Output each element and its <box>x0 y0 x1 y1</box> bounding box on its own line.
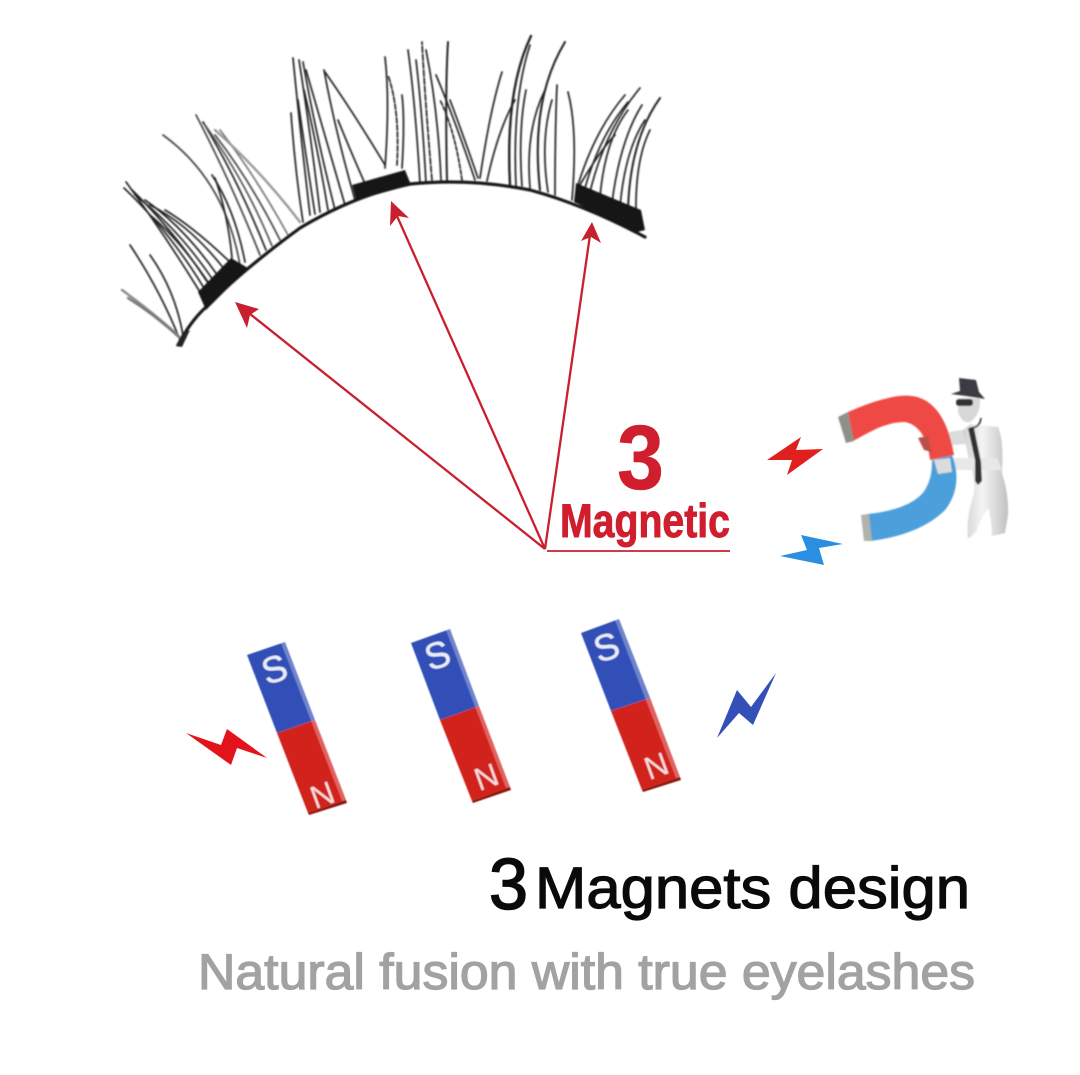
words: Magnets design <box>535 856 970 921</box>
icon: horseshoe magnet with man <box>838 378 1008 541</box>
magnet end: red <box>838 412 854 443</box>
bar magnet 3: S <box>588 624 625 671</box>
heading: 3Magnets design <box>489 845 970 925</box>
bar magnet 1: S <box>256 646 293 693</box>
icon: blue lightning <box>717 673 776 738</box>
arrow to right magnet <box>545 222 601 549</box>
magnet: red pole <box>848 396 954 460</box>
word Magnetic: Magnetic <box>560 494 730 547</box>
man legs and torso <box>956 424 1008 539</box>
underline <box>547 550 730 552</box>
lash band <box>178 182 645 345</box>
magnet strip: left <box>198 258 248 310</box>
bar magnet 1: N <box>305 774 339 816</box>
tie <box>968 428 982 485</box>
magnet strip: middle <box>352 170 411 200</box>
collar <box>970 418 981 428</box>
hat <box>951 378 985 399</box>
bar magnet 2: N <box>469 756 503 798</box>
arrow to left magnet <box>235 302 545 549</box>
sunglasses <box>956 399 973 406</box>
magnet strip: right <box>574 183 645 232</box>
eyelash strip <box>122 36 660 347</box>
man <box>922 378 1008 539</box>
icon: blue spark <box>780 535 843 565</box>
heading: 3 Magnetic <box>560 407 730 547</box>
arrow to middle magnet <box>390 201 545 549</box>
number 3: 3 <box>617 407 664 509</box>
icon: red spark <box>767 437 823 475</box>
bar magnet 1 <box>247 642 347 816</box>
bar magnet 3: N <box>639 745 673 787</box>
upper arm to magnet <box>922 430 966 448</box>
lash band tip <box>176 330 190 347</box>
lower arm to magnet <box>936 458 1002 470</box>
icon: red lightning <box>186 729 267 765</box>
bar magnet 3 <box>581 619 681 792</box>
magnet end: blue <box>861 514 872 541</box>
hand on blue pole <box>934 458 952 474</box>
head <box>958 398 980 422</box>
hand on red pole <box>918 436 932 452</box>
subheading: Natural fusion with true eyelashes <box>198 944 975 1000</box>
lash hairs <box>122 36 660 340</box>
callout arrows <box>235 201 730 551</box>
bar magnet 2: S <box>419 632 456 679</box>
magnet: blue pole <box>867 455 956 541</box>
number 3: 3 <box>489 845 528 925</box>
bar magnet 2 <box>411 629 511 803</box>
